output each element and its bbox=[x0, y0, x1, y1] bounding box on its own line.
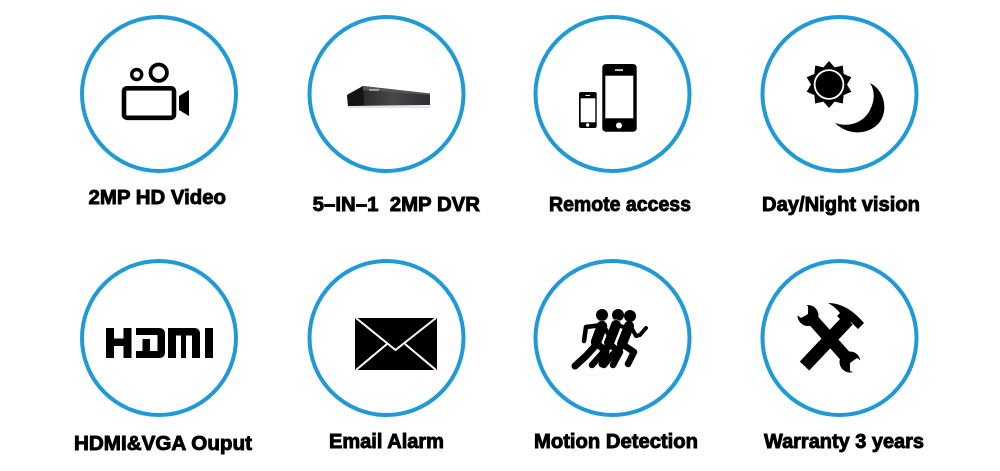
icon: sun and moon bbox=[807, 61, 884, 132]
icon: phones bbox=[579, 64, 637, 132]
icon: wrench and hammer bbox=[793, 302, 866, 375]
icon: HDMI logo bbox=[106, 328, 213, 358]
label: 5-IN-1 2MP DVR: 5–IN–1 2MP DVR bbox=[313, 194, 481, 216]
label: Remote access: Remote access bbox=[549, 194, 691, 216]
label: HDMI&VGA Ouput: HDMI&VGA Ouput bbox=[74, 433, 252, 455]
circle: warranty bbox=[762, 261, 916, 415]
icon: running figures bbox=[575, 309, 646, 366]
circle: video bbox=[82, 17, 236, 171]
circle: motion bbox=[536, 261, 690, 415]
circle: dvr bbox=[310, 17, 464, 171]
icon: DVR recorder bbox=[347, 86, 430, 108]
panel: 2MP HD Video bbox=[82, 17, 236, 209]
panel: Motion Detection bbox=[534, 261, 698, 453]
icon: envelope bbox=[355, 318, 437, 370]
icon: video camera bbox=[124, 64, 189, 118]
panel: HDMI & VGA output bbox=[74, 261, 252, 455]
panel: 5-in-1 DVR bbox=[310, 17, 481, 216]
circle: hdmi bbox=[82, 261, 236, 415]
label: 2MP HD Video: 2MP HD Video bbox=[88, 187, 226, 209]
circle: email bbox=[310, 261, 464, 415]
label: Motion Detection: Motion Detection bbox=[534, 431, 698, 453]
panel: Email Alarm bbox=[310, 261, 464, 453]
panel: Remote access bbox=[536, 17, 691, 216]
panel: Warranty 3 years bbox=[762, 261, 924, 453]
label: Day/Night vision: Day/Night vision bbox=[762, 194, 920, 216]
label: Email Alarm: Email Alarm bbox=[329, 431, 444, 453]
circle: day night bbox=[762, 17, 916, 171]
panel: Day/Night vision bbox=[762, 17, 920, 216]
circle: remote bbox=[536, 17, 690, 171]
label: Warranty 3 years: Warranty 3 years bbox=[764, 431, 924, 453]
